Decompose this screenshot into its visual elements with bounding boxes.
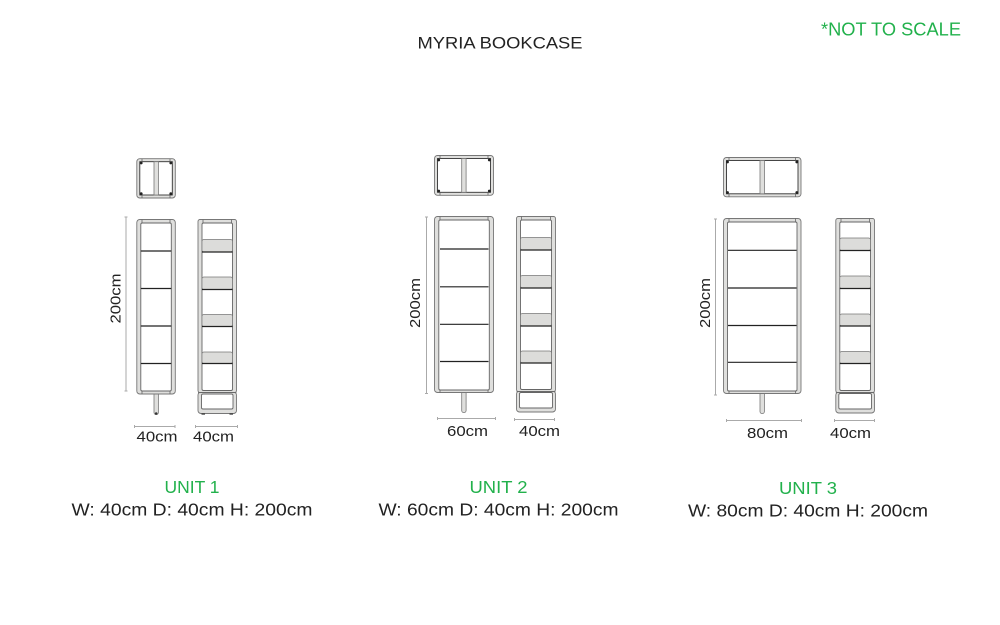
unit 1 top view <box>137 159 175 198</box>
unit 3 label <box>688 478 928 520</box>
unit 2 dimensions <box>407 217 560 440</box>
unit 2 side view <box>516 216 556 412</box>
unit 3 top view <box>724 158 801 197</box>
unit 2 top view <box>434 156 494 195</box>
unit 1 side view <box>198 220 236 414</box>
unit 3 dimensions: 80cm <box>747 425 788 442</box>
panel: unit 2 <box>378 156 618 520</box>
unit 3 dimensions <box>697 219 874 442</box>
unit 2 label: UNIT 2 <box>470 477 528 497</box>
unit 1 front view <box>137 220 175 415</box>
unit 1 dimensions: 40cm <box>136 428 178 446</box>
unit 1 dimensions: 200cm <box>108 274 124 323</box>
panel: unit 1 <box>72 159 312 519</box>
unit 3 label: W: 80cm D: 40cm H: 200cm <box>688 500 928 520</box>
note: not to scale: *NOT TO SCALE <box>821 20 961 40</box>
unit 2 label <box>378 477 618 520</box>
unit 1 dimensions: 40cm <box>193 428 234 446</box>
unit 3 dimensions: 200cm <box>697 278 714 328</box>
unit 2 dimensions: 40cm <box>519 423 560 440</box>
unit 1 label: W: 40cm D: 40cm H: 200cm <box>72 500 312 520</box>
unit 3 label: UNIT 3 <box>779 478 837 498</box>
unit 3 side view <box>836 218 874 413</box>
title: MYRIA BOOKCASE <box>418 34 582 52</box>
unit 2 label: W: 60cm D: 40cm H: 200cm <box>378 500 618 520</box>
unit 3 front view <box>724 218 801 414</box>
panel: unit 3 <box>688 158 928 520</box>
unit 1 label: UNIT 1 <box>164 477 220 497</box>
unit 1 label <box>72 477 312 520</box>
unit 2 dimensions: 60cm <box>447 423 488 440</box>
unit 2 dimensions: 200cm <box>407 278 424 328</box>
unit 3 dimensions: 40cm <box>830 425 871 442</box>
unit 2 front view <box>434 216 494 412</box>
unit 1 dimensions <box>108 217 238 446</box>
